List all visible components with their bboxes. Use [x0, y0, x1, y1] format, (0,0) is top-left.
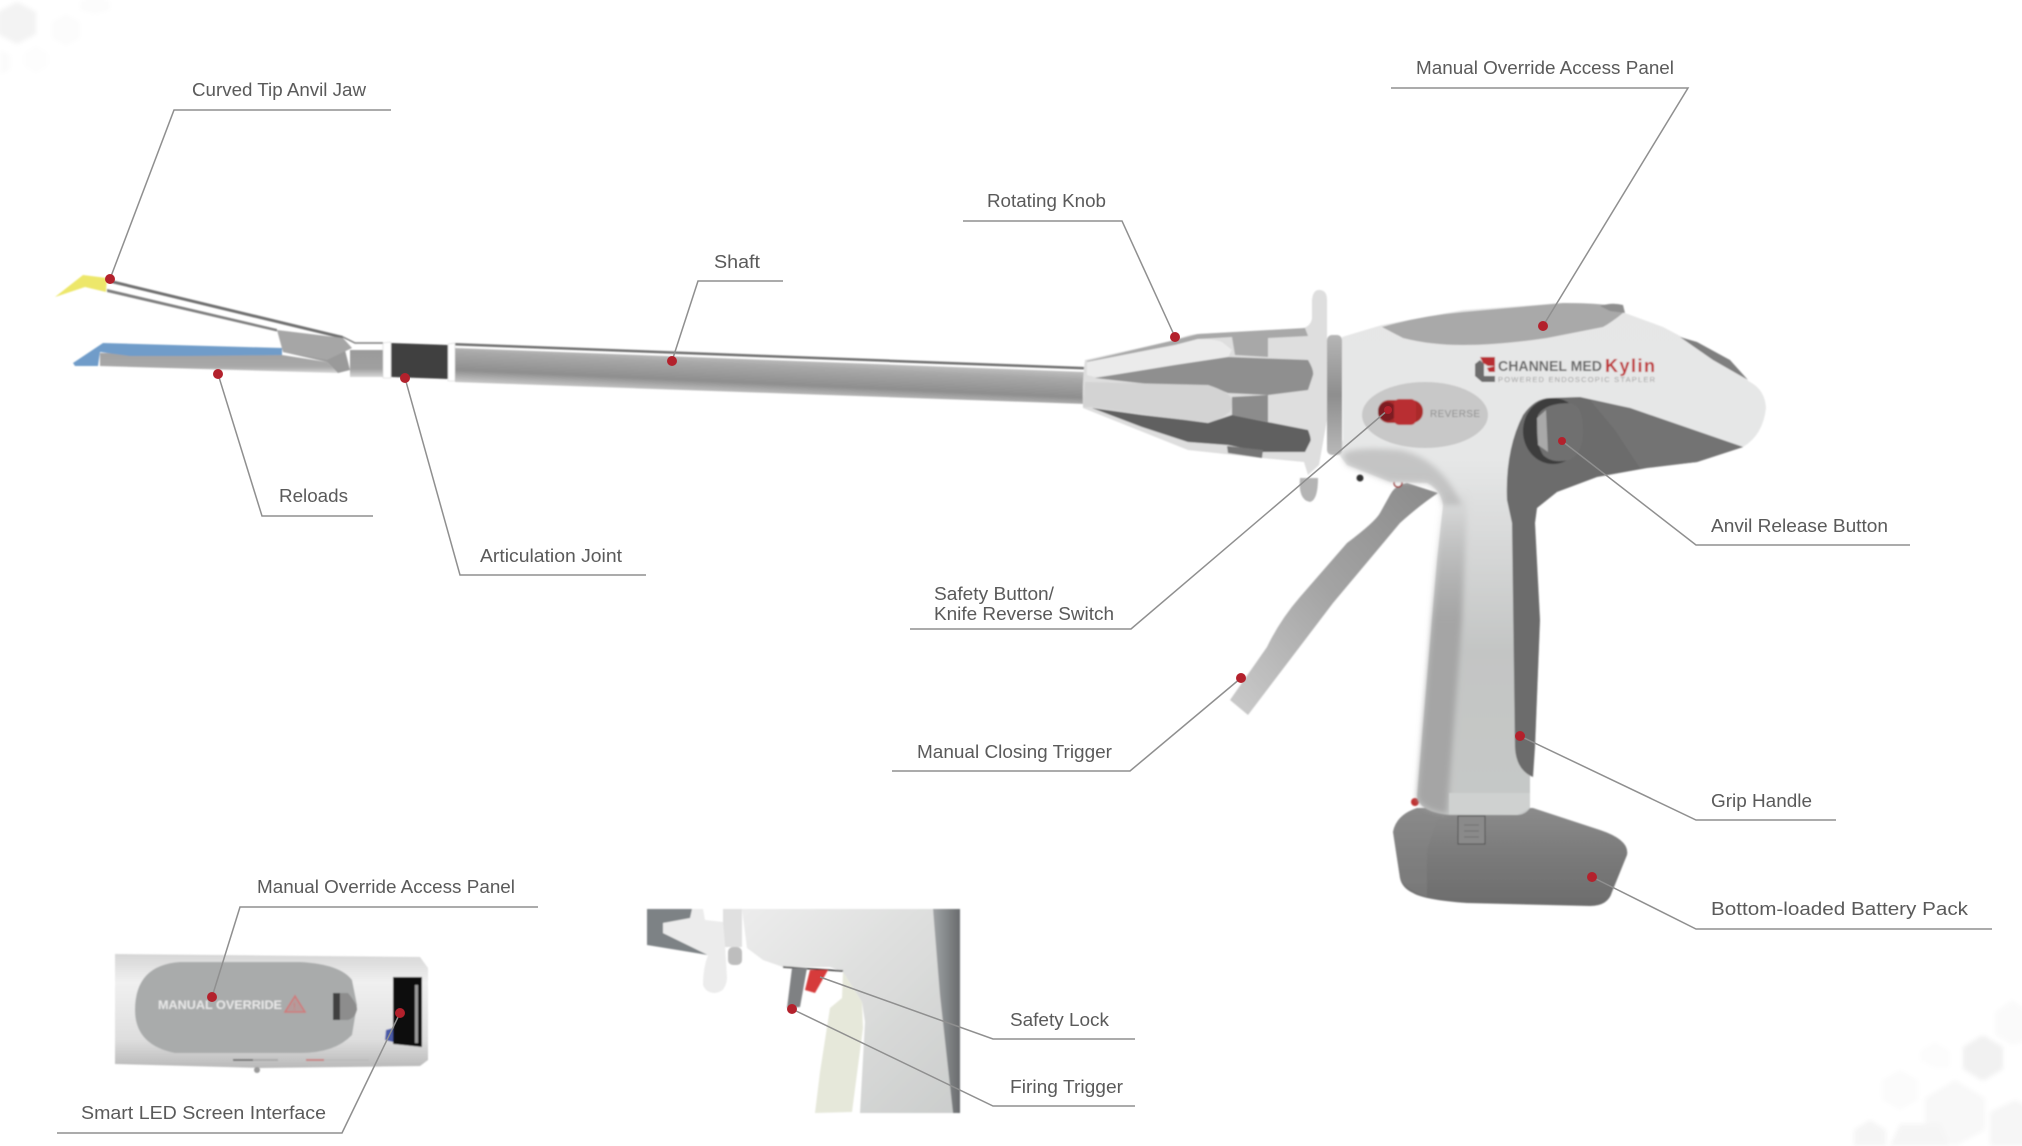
background hexagon pattern: bottom right [1854, 1000, 2022, 1146]
safety lock [805, 970, 828, 993]
callout: Articulation Joint [400, 373, 646, 575]
callout: Manual Override Access Panel (inset) [207, 877, 538, 1002]
callout: Bottom-loaded Battery Pack [1587, 872, 1992, 929]
brand logo: POWERED ENDOSCOPIC STAPLER [1498, 375, 1656, 384]
closing trigger [1230, 474, 1438, 715]
top view housing [115, 954, 428, 1068]
callout: Manual Override Access Panel (inset): Manual Override Access Panel [257, 877, 515, 897]
rear knob collar [1327, 335, 1342, 455]
reverse switch plate: REVERSE [1430, 409, 1480, 420]
callout: Anvil Release Button [1558, 437, 1910, 545]
callout: Grip Handle [1515, 731, 1836, 820]
close-up closing trigger [815, 972, 863, 1113]
small logo strip [233, 1059, 369, 1073]
brand logo [1475, 356, 1656, 384]
close-up dark strip [933, 909, 960, 1113]
callout: Manual Closing Trigger: Manual Closing Trigger [917, 742, 1112, 762]
callout: Smart LED Screen Interface: Smart LED Screen Interface [81, 1103, 326, 1123]
brand logo: Kylin [1605, 356, 1655, 376]
callout: Rotating Knob [963, 191, 1180, 342]
top panel [1382, 303, 1625, 345]
battery pack [1393, 798, 1627, 906]
stapler main illustration [55, 275, 1766, 906]
reverse switch plate [1362, 382, 1488, 448]
close-up flange and hook [663, 909, 727, 993]
callout: Shaft: Shaft [714, 252, 760, 272]
curved tip anvil jaw [55, 275, 352, 360]
callout: Safety Button / Knife Reverse Switch: Knife Reverse Switch [934, 604, 1114, 624]
manual override panel [135, 962, 357, 1053]
close-up dark background corner [647, 909, 708, 955]
manual override panel: MANUAL OVERRIDE [158, 998, 282, 1012]
callout: Curved Tip Anvil Jaw [105, 80, 391, 284]
close-up underside edge [783, 967, 843, 971]
background hexagon pattern: top left [0, 0, 110, 74]
smart LED screen [385, 977, 422, 1047]
close-up body [742, 909, 953, 1113]
reload jaw [73, 343, 350, 373]
callout: Reloads [213, 369, 373, 516]
callout: Manual Override Access Panel (main): Manual Override Access Panel [1416, 58, 1674, 78]
firing trigger [787, 968, 807, 1008]
callout: Anvil Release Button: Anvil Release Button [1711, 516, 1888, 536]
callout: Reloads: Reloads [279, 486, 348, 506]
anvil release button [1523, 398, 1583, 464]
callout: Grip Handle: Grip Handle [1711, 791, 1812, 811]
callout: Safety Lock: Safety Lock [1010, 1010, 1110, 1030]
callout: Rotating Knob: Rotating Knob [987, 191, 1106, 211]
manual override panel: ! [293, 1002, 296, 1013]
callout: Safety Lock [820, 977, 1135, 1039]
flange lever [1300, 478, 1318, 502]
close-up collar [723, 909, 742, 947]
handle and body [1337, 303, 1766, 815]
brand logo: CHANNEL MED [1498, 358, 1602, 375]
dark grip panel [1507, 397, 1743, 777]
callout: Safety Button / Knife Reverse Switch: Safety Button/ [934, 584, 1054, 604]
callout: Articulation Joint: Articulation Joint [480, 546, 622, 566]
rear display panel [1680, 337, 1748, 380]
callout: Safety Button / Knife Reverse Switch [910, 406, 1392, 629]
callout: Shaft [667, 252, 783, 366]
callout: Manual Override Access Panel (main) [1391, 58, 1688, 331]
inset: trigger close-up [647, 909, 960, 1113]
articulation joint [343, 337, 455, 381]
callout: Curved Tip Anvil Jaw: Curved Tip Anvil Jaw [192, 80, 367, 100]
callout: Bottom-loaded Battery Pack: Bottom-loaded Battery Pack [1711, 899, 1969, 919]
close-up grey nub [728, 947, 742, 965]
shaft tube [455, 343, 1085, 404]
callout: Firing Trigger [787, 1004, 1135, 1106]
callout: Smart LED Screen Interface [57, 1008, 405, 1133]
callout: Manual Closing Trigger [892, 673, 1246, 771]
inset: top view of device [115, 954, 428, 1073]
callout: Firing Trigger: Firing Trigger [1010, 1077, 1123, 1097]
rotating knob [1083, 290, 1327, 475]
